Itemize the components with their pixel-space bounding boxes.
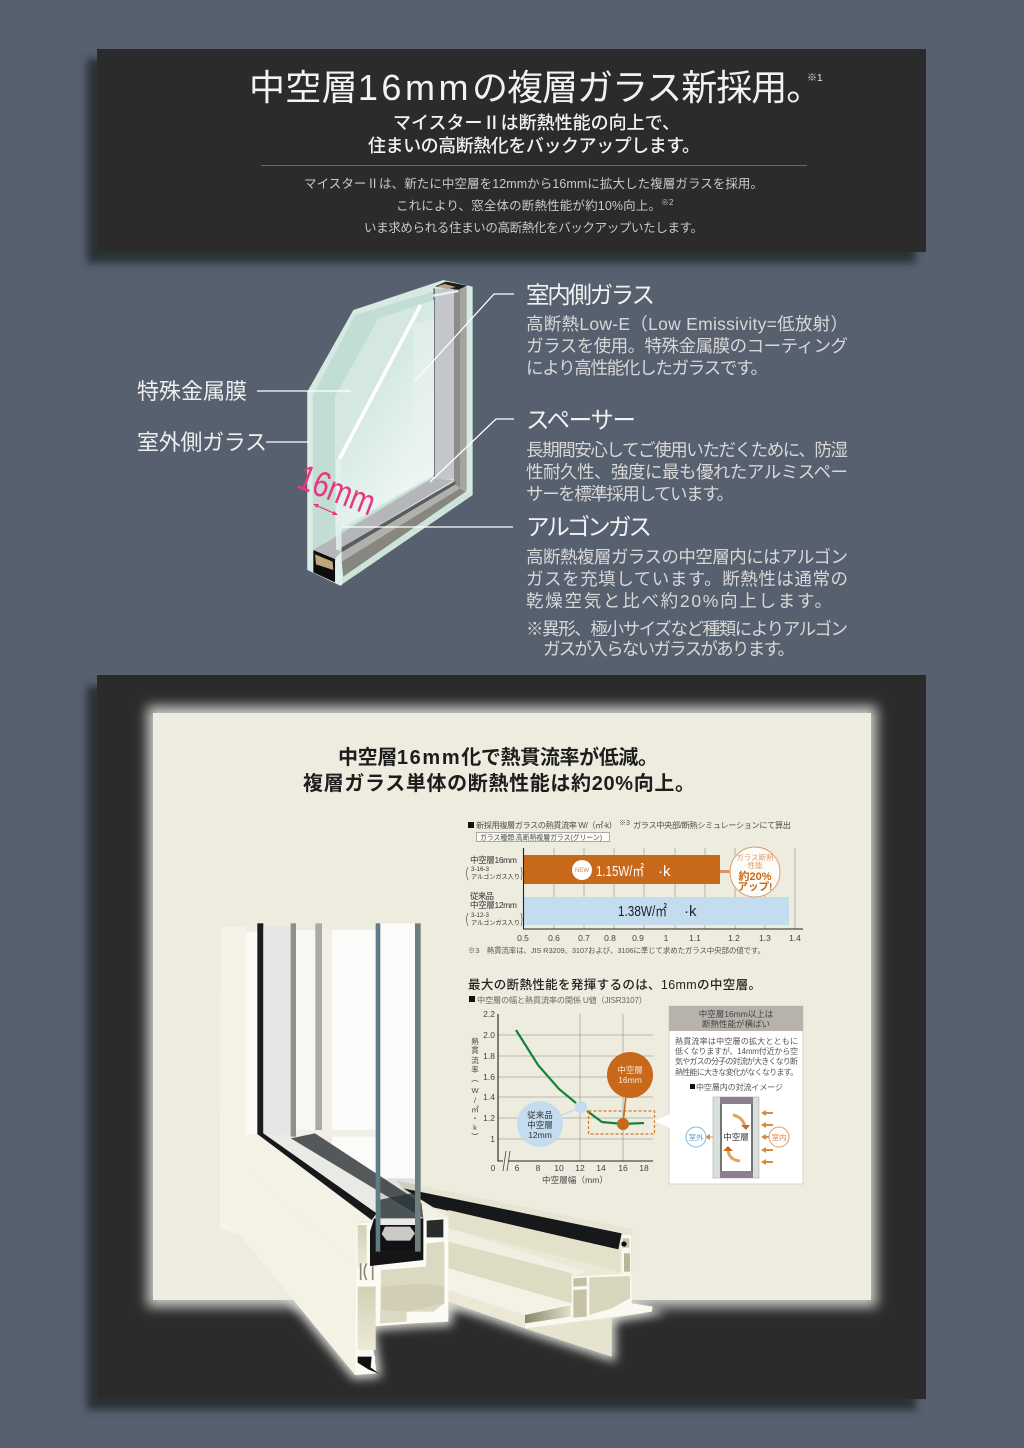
panel: convection explanation: [654, 1006, 803, 1184]
panel text: [675, 1036, 798, 1077]
header body text: ※2: [661, 198, 674, 207]
dimension: 16mm: 16mm: [292, 456, 382, 523]
header body text: これにより、窓全体の断熱性能が約10%向上。: [396, 198, 661, 213]
axis labels: 0.7: [578, 933, 590, 943]
line chart: gap width vs U value: [469, 995, 654, 1185]
line chart: gap width vs U value: 中空層の幅と熱貫流率の関係 U値（JISR3107）: [477, 995, 647, 1005]
bar: 12mm: [524, 897, 789, 925]
text block: spacer: スペーサー: [526, 407, 636, 433]
axis labels: [517, 933, 801, 943]
text block: spacer: 長期間安心してご使用いただくために、防湿: [526, 440, 848, 460]
y labels: 2.2: [483, 1009, 495, 1019]
x labels: 14: [596, 1163, 606, 1173]
category labels: アルゴンガス入り: [471, 919, 520, 927]
leader lines: [257, 294, 514, 527]
y labels: [483, 1009, 495, 1144]
category labels: アルゴンガス入り: [471, 873, 520, 881]
bar chart: heat transmittance: ·k: [684, 903, 697, 920]
callout: 20% up: [720, 847, 780, 897]
glass outer silhouette: [307, 280, 473, 586]
y axis title: 率: [471, 1065, 479, 1074]
marker: 12mm: 従来品: [527, 1110, 553, 1120]
panel header: [669, 1006, 803, 1031]
category labels: 3-12-3: [471, 912, 489, 919]
cream inner panel: [153, 713, 871, 1300]
x labels: 8: [536, 1163, 541, 1173]
text block: indoor glass: [526, 282, 848, 378]
line chart: gap width vs U value: 中空層幅（mm）: [542, 1175, 608, 1185]
text block: indoor glass: により高性能化したガラスです。: [526, 358, 768, 378]
footnote mark: ※1: [807, 73, 823, 84]
y axis title: ㎡: [471, 1105, 479, 1114]
marker: 12mm: 12mm: [528, 1130, 552, 1140]
header body text: [304, 173, 763, 235]
axis labels: 1.2: [728, 933, 740, 943]
left labels: 室外側ガラス: [137, 430, 267, 455]
back frame: [220, 927, 247, 1228]
subtitle: マイスターⅡは断熱性能の向上で、: [393, 109, 680, 135]
y axis title: ): [471, 1133, 480, 1136]
rail section: [525, 1273, 653, 1328]
marker: 16mm: 中空層: [617, 1065, 643, 1075]
category labels: 中空層12mm: [470, 900, 517, 910]
y labels: 2.0: [483, 1030, 495, 1040]
text block: argon gas: 高断熱複層ガラスの中空層内にはアルゴン: [526, 547, 848, 567]
left labels: [137, 379, 267, 455]
top spacer cap: [435, 282, 467, 290]
text block: argon gas: 乾燥空気と比べ約20%向上します。: [526, 591, 832, 611]
header body text: いま求められる住まいの高断熱化をバックアップいたします。: [364, 220, 703, 235]
subtitle: [368, 109, 700, 156]
category labels: 従来品: [470, 891, 494, 901]
indoor arrows: [761, 1110, 773, 1165]
y axis title: ・: [471, 1114, 479, 1123]
lower panel heading: [303, 745, 695, 795]
axis labels: 0.9: [632, 933, 644, 943]
y labels: 1.8: [483, 1051, 495, 1061]
front edge: [336, 458, 342, 586]
text block: argon gas: [526, 514, 848, 659]
y labels: 1.2: [483, 1113, 495, 1123]
panel: header: [87, 49, 926, 263]
bar chart: heat transmittance: 1.38W/㎡: [618, 903, 667, 920]
callout: 20% up: ガラス断熱: [736, 852, 774, 862]
y axis title: 流: [471, 1055, 479, 1065]
text block: argon gas: アルゴンガス: [526, 514, 652, 540]
bar chart: heat transmittance: ·k: [658, 863, 671, 880]
x labels: [491, 1163, 649, 1173]
lower panel heading: 中空層16mm化で熱貫流率が低減。: [338, 745, 658, 769]
category labels: 中空層16mm: [470, 855, 517, 865]
convection diagram: 中空層: [723, 1132, 749, 1142]
front pane: [340, 300, 434, 527]
right spacer: [434, 288, 454, 479]
axis labels: 1: [664, 933, 669, 943]
bar chart: heat transmittance: NEW: [575, 868, 589, 874]
mint rear pane: [313, 292, 433, 550]
double glass panes: [376, 923, 380, 1252]
y labels: 1: [490, 1134, 495, 1144]
outdoor badge: [686, 1127, 706, 1147]
category labels: 3-16-3: [471, 866, 489, 873]
y axis title: [471, 1036, 480, 1136]
text block: argon gas: ガスを充填しています。断熱性は通常の: [526, 569, 848, 589]
grid: [498, 1014, 653, 1161]
axis labels: 1.4: [789, 933, 801, 943]
y axis title: 貫: [471, 1046, 479, 1055]
panel text: 低くなりますが、14mm付近から空: [675, 1046, 798, 1056]
section cut: [355, 1217, 448, 1375]
text block: argon gas: ガスが入らないガラスがあります。: [543, 639, 795, 659]
text block: indoor glass: 室内側ガラス: [526, 282, 655, 308]
axes: [524, 848, 803, 929]
panel text: 気やガスの分子の対流が大きくなり断: [675, 1056, 798, 1066]
bar chart: heat transmittance: [466, 819, 803, 955]
curve: [516, 1030, 644, 1124]
window highlight: [339, 305, 421, 459]
chart title: ガラス中央部/断熱シミュレーションにて算出: [633, 820, 791, 830]
text block: spacer: サーを標準採用しています。: [526, 484, 734, 504]
chart title: [468, 819, 791, 842]
bottom spacer surface: [314, 478, 454, 550]
marker: 16mm: [607, 1052, 653, 1130]
bar: 16mm: [524, 855, 720, 884]
coating layer: [335, 300, 434, 535]
callout: 20% up: 約20%: [738, 869, 772, 883]
subtitle: 住まいの高断熱化をバックアップします。: [368, 136, 700, 156]
left labels: 特殊金属膜: [137, 379, 247, 404]
panel text: 熱貫流率は中空層の拡大とともに: [675, 1036, 798, 1046]
title: 中空層16mmの複層ガラス新採用。: [249, 67, 821, 108]
axis labels: 0.6: [548, 933, 560, 943]
axis labels: 1.3: [759, 933, 771, 943]
convection diagram: [686, 1097, 789, 1178]
bar values: 1.15W/㎡: [596, 863, 644, 880]
lower panel heading: 複層ガラス単体の断熱性能は約20%向上。: [303, 772, 695, 795]
panel: lower dark panel: [87, 675, 926, 1410]
y axis title: (: [471, 1080, 480, 1083]
y labels: 1.4: [483, 1092, 495, 1102]
panel: convection explanation: 中空層内の対流イメージ: [696, 1082, 783, 1092]
window frame illustration: [220, 923, 653, 1375]
convection diagram: 室外: [688, 1132, 704, 1142]
glow: [147, 706, 877, 1307]
sill: [235, 1134, 372, 1267]
x labels: 10: [554, 1163, 564, 1173]
callout: 20% up: アップ!: [738, 881, 772, 893]
panel text: 熱性能に大きな変化がなくなります。: [675, 1067, 798, 1077]
right rail: [397, 1181, 653, 1357]
category labels: [466, 855, 522, 927]
header body text: マイスターⅡは、新たに中空層を12mmから16mmに拡大した複層ガラスを採用。: [304, 173, 763, 192]
axes: [498, 1014, 653, 1161]
indoor badge: [769, 1127, 789, 1147]
foam: [382, 1227, 415, 1241]
x labels: 12: [575, 1163, 585, 1173]
text block: argon gas: ※異形、極小サイズなど種類によりアルゴン: [526, 619, 848, 639]
footnote: ※3 熱貫流率は、JIS R3209、3107および、3106に準じて求めたガラス中央部の値です。: [468, 945, 765, 955]
panel: convection explanation: 中空層16mm以上は: [699, 1009, 774, 1019]
text block: indoor glass: ガラスを使用。特殊金属膜のコーティング: [526, 336, 848, 356]
text block: spacer: 性耐久性、強度に最も優れたアルミスペー: [526, 462, 848, 482]
axis labels: 0.8: [604, 933, 616, 943]
diagram: double glazing cross-section: [307, 280, 473, 586]
axis labels: 1.1: [689, 933, 701, 943]
x labels: 16: [618, 1163, 628, 1173]
dashed highlight: [588, 1111, 654, 1134]
y labels: 1.6: [483, 1072, 495, 1082]
callout: 20% up: 性能: [748, 860, 763, 870]
y axis title: W: [471, 1086, 479, 1095]
bottom glass edge: [340, 491, 473, 586]
y axis title: /: [474, 1096, 477, 1105]
convection diagram: 室内: [772, 1132, 786, 1142]
panel: convection explanation: 断熱性能が横ばい: [702, 1019, 770, 1029]
chart title: ※3: [619, 819, 630, 827]
marker: 12mm: 中空層: [527, 1120, 553, 1130]
chart title: ガラス種類:高断熱複層ガラス(グリーン): [480, 832, 602, 842]
x labels: 18: [639, 1163, 649, 1173]
grid: [554, 848, 795, 929]
chart title: 新採用複層ガラスの熱貫流率 W/（㎡·k）: [476, 820, 617, 830]
x labels: 6: [515, 1163, 520, 1173]
line chart heading: 最大の断熱性能を発揮するのは、16mmの中空層。: [468, 977, 761, 992]
marker: 12mm: [517, 1101, 587, 1147]
text block: indoor glass: 高断熱Low-E（Low Emissivity=低放射）: [526, 314, 848, 334]
spacer end cap: [313, 550, 335, 582]
new badge: [572, 860, 592, 880]
y axis title: 熱: [471, 1036, 479, 1046]
y axis title: k: [473, 1123, 477, 1132]
marker: 16mm: 16mm: [618, 1075, 642, 1085]
text block: spacer: [526, 407, 848, 504]
x labels: 0: [491, 1163, 496, 1173]
axis labels: 0.5: [517, 933, 529, 943]
